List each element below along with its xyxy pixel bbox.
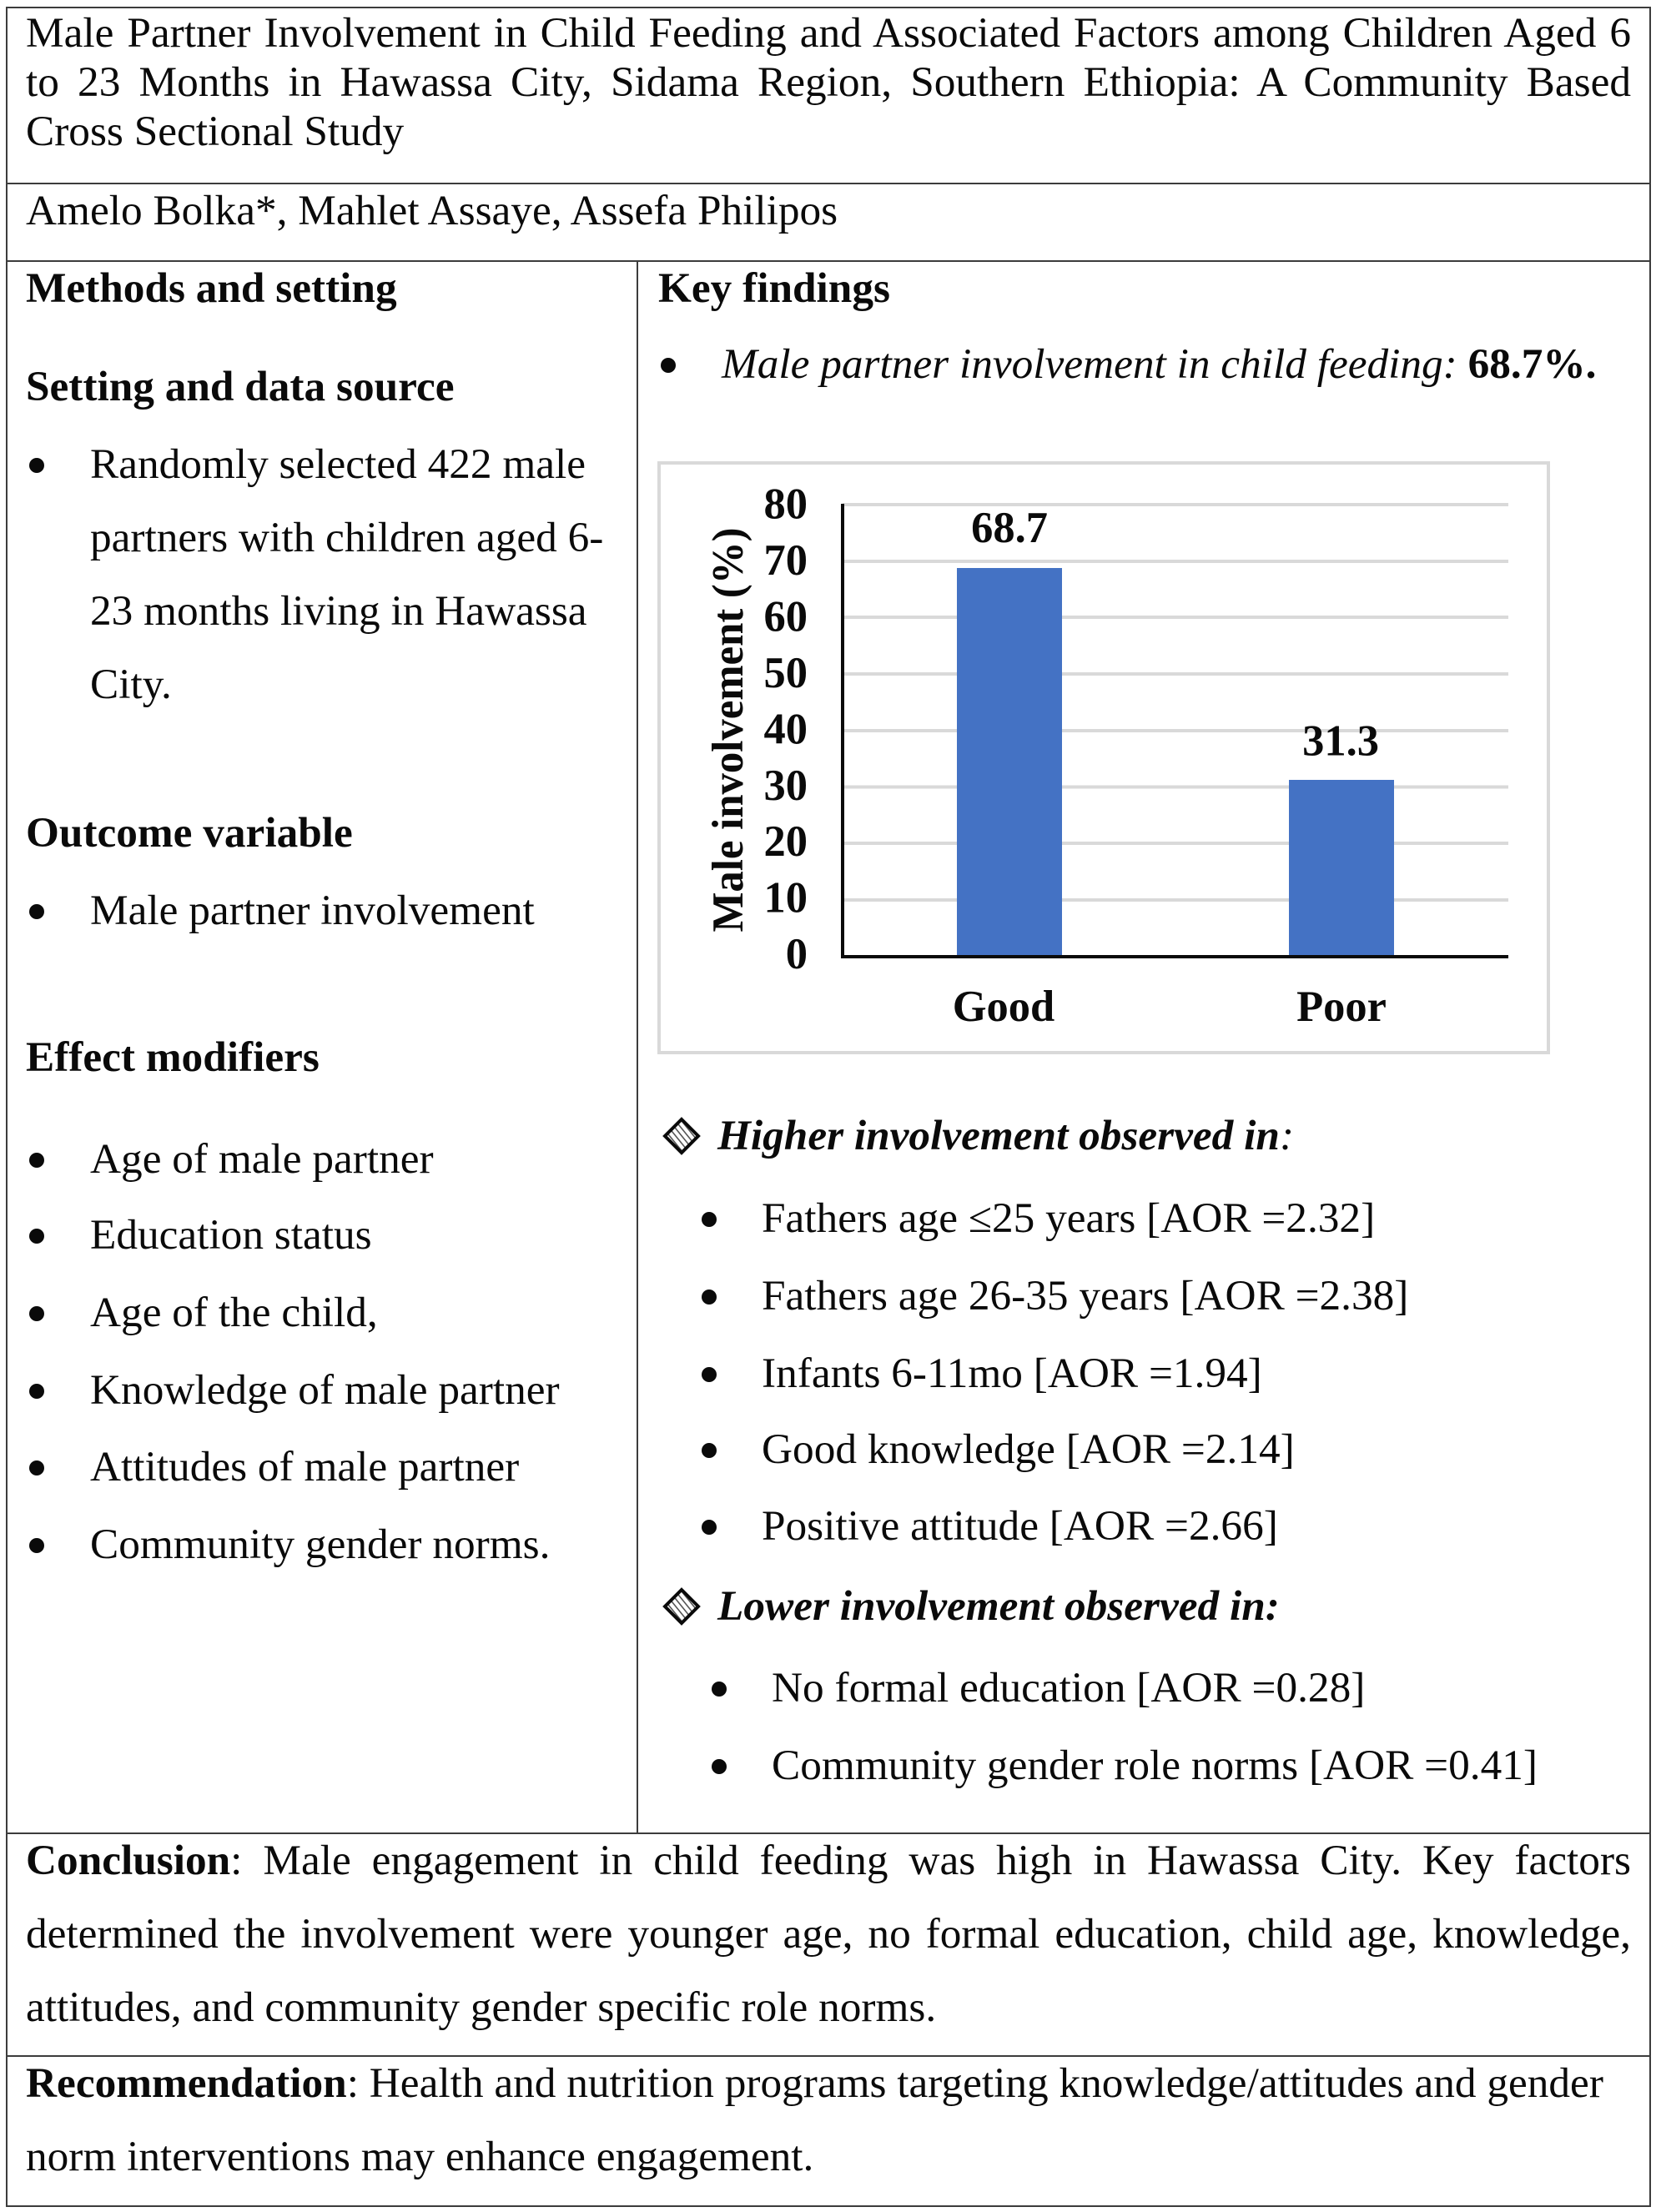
heading: key findings: Key findings [658, 264, 890, 312]
heading: setting and data source: Setting and data source [26, 363, 454, 410]
heading: methods and setting: Methods and setting [26, 264, 397, 312]
panel: recommendation [6, 2055, 1651, 2207]
y axis ticks [764, 480, 808, 978]
icon: hatched diamond [662, 1587, 701, 1626]
finding: positive attitude: Positive attitude [AOR =2.66] [762, 1502, 1278, 1550]
y axis ticks: 40 [764, 706, 808, 754]
finding: community gender role norms: Community gender role norms [AOR =0.41] [772, 1742, 1538, 1789]
bullet: sample [29, 440, 603, 708]
y axis ticks: 20 [764, 817, 808, 866]
recommendation text [26, 2059, 1603, 2180]
finding: no formal education: No formal education [AOR =0.28] [772, 1664, 1365, 1712]
y axis ticks: 10 [764, 874, 808, 923]
authors text: Amelo Bolka*, Mahlet Assaye, Assefa Philipos [26, 187, 838, 234]
category label: good: Good [953, 983, 1055, 1031]
title text: to 23 Months in Hawassa City, Sidama Region, Southern Ethiopia: A Community Based [26, 58, 1631, 105]
panel: methods and setting [6, 260, 638, 1834]
y axis title: Male involvement (%) [704, 527, 752, 933]
bar chart [657, 461, 1550, 1054]
panel: key findings [637, 260, 1651, 1834]
y axis ticks: 0 [786, 930, 808, 978]
heading: outcome variable: Outcome variable [26, 809, 353, 857]
conclusion text: attitudes, and community gender specific role norms. [26, 1983, 936, 2031]
bullet: knowledge: Knowledge of male partner [90, 1366, 560, 1414]
bullet: outcome: Male partner involvement [90, 887, 535, 934]
panel: title [6, 7, 1651, 184]
finding: fathers age 25 or under: Fathers age ≤25 years [AOR =2.32] [762, 1194, 1375, 1242]
title text [26, 8, 1631, 155]
conclusion text [26, 1837, 1631, 2031]
y axis ticks: 70 [764, 536, 808, 585]
icon: hatched diamond [662, 1117, 701, 1155]
bar: good [957, 568, 1062, 956]
heading: higher involvement: Higher involvement observed in: [717, 1112, 1294, 1159]
heading: effect modifiers: Effect modifiers [26, 1033, 320, 1081]
bullet: sample: City. [90, 661, 172, 708]
y axis ticks: 60 [764, 592, 808, 641]
bar: poor [1289, 780, 1394, 956]
bullet: attitudes: Attitudes of male partner [90, 1443, 519, 1491]
finding: infants: Infants 6-11mo [AOR =1.94] [762, 1350, 1262, 1397]
category label: poor: Poor [1296, 983, 1387, 1031]
finding: fathers age 26-35: Fathers age 26-35 years [AOR =2.38] [762, 1272, 1408, 1320]
bullet: age of the child: Age of the child, [90, 1289, 378, 1336]
y axis ticks: 80 [764, 480, 808, 529]
bullet: prevalence: Male partner involvement in child feeding: 68.7%. [722, 340, 1596, 388]
bullet: age of male partner: Age of male partner [90, 1135, 434, 1183]
panel: authors [6, 183, 1651, 262]
bullet: sample: 23 months living in Hawassa [90, 587, 587, 635]
title text: Male Partner Involvement in Child Feeding and Associated Factors among Children Aged 6 [26, 8, 1631, 57]
recommendation text: Recommendation: Health and nutrition programs targeting knowledge/attitudes and gender [26, 2059, 1603, 2107]
heading: lower involvement: Lower involvement observed in: [717, 1582, 1280, 1630]
axes [843, 504, 1508, 957]
bullet: sample: partners with children aged 6- [90, 514, 603, 561]
y axis ticks: 30 [764, 762, 808, 810]
bullet: sample: Randomly selected 422 male [90, 440, 586, 488]
conclusion text: Conclusion: Male engagement in child feeding was high in Hawassa City. Key factors [26, 1837, 1631, 1884]
recommendation text: norm interventions may enhance engagement. [26, 2133, 813, 2180]
conclusion text: determined the involvement were younger age, no formal education, child age, knowledge, [26, 1910, 1631, 1958]
value label: good: 68.7 [971, 504, 1048, 552]
bullet: community gender norms: Community gender norms. [90, 1521, 550, 1568]
panel: conclusion [6, 1832, 1651, 2057]
finding: good knowledge: Good knowledge [AOR =2.14] [762, 1425, 1295, 1473]
value label: poor: 31.3 [1302, 717, 1379, 766]
title text: Cross Sectional Study [26, 107, 404, 155]
y axis ticks: 50 [764, 649, 808, 697]
bullet: education status: Education status [90, 1211, 372, 1259]
